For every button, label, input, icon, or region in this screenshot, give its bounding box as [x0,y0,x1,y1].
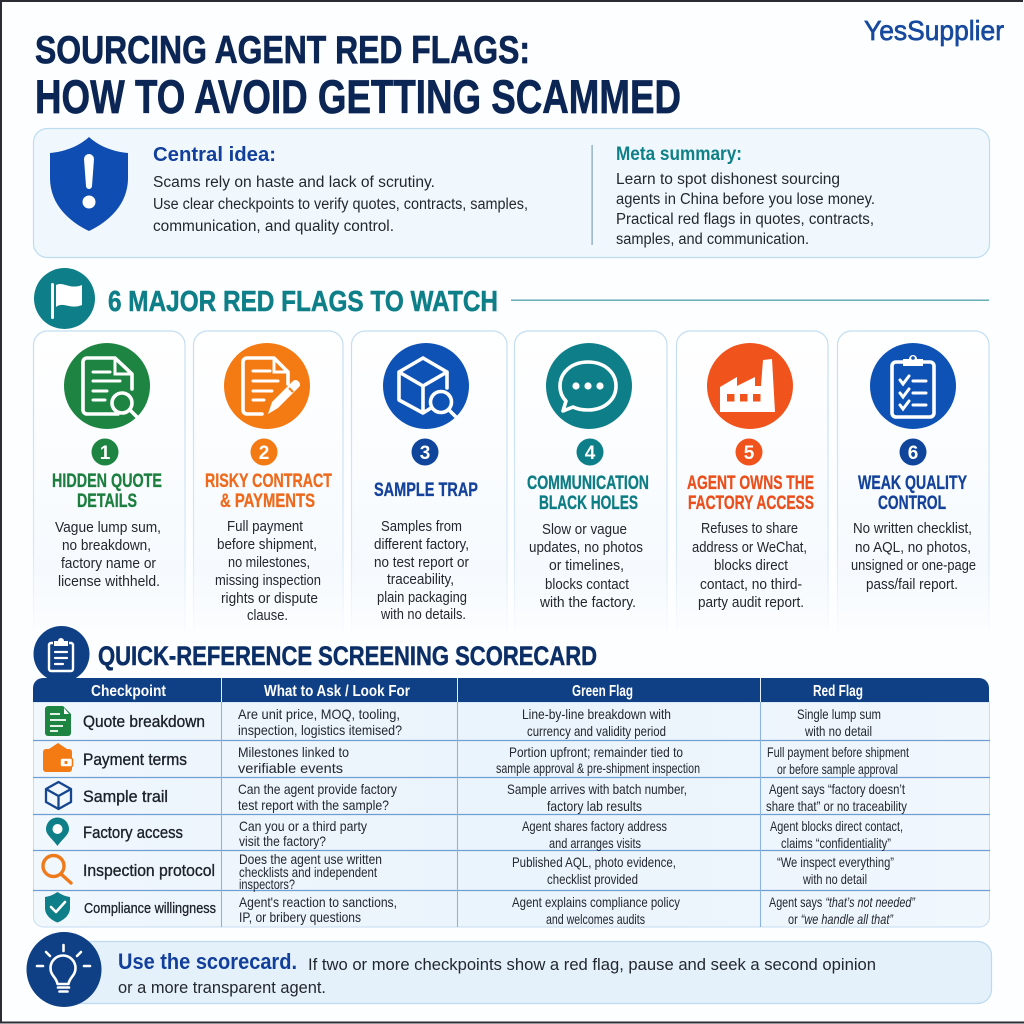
row: compliance willingness: Compliance willingness [84,900,216,917]
row: inspection protocol: with no detail [802,871,867,887]
card description: missing inspection [215,573,321,589]
panel: card 6 weak quality control [838,331,989,630]
title: HOW TO AVOID GETTING SCAMMED [35,71,681,124]
row: quote breakdown: inspection, logistics itemised? [238,722,402,738]
icon: clipboard [34,626,90,682]
icon: warning shield [50,137,128,231]
icon: green document [45,706,71,736]
row: inspection protocol [43,851,894,892]
callout: use the scorecard [26,932,992,1007]
heading: quick-reference screening scorecard [34,626,597,682]
card description: no AQL, no photos, [855,540,971,556]
table header [33,678,989,702]
table header: Green Flag [572,683,633,700]
panel: card 1 hidden quote details [34,331,185,630]
callout text: Use the scorecard. [118,949,297,974]
row: payment terms: sample approval & pre-shipment inspection [496,760,700,776]
icon: teal shield check [45,892,70,922]
row: factory access: Factory access [83,824,183,842]
card description [374,519,469,623]
card description: or timelines, [549,558,624,574]
card description: Full payment [227,519,303,535]
card description: with the factory. [539,595,636,611]
callout panel [60,942,992,1004]
number 2: 2 [259,443,269,464]
number 1 [92,438,118,466]
card description: No written checklist, [853,521,972,537]
table header: Checkpoint [91,683,167,700]
icon: speech bubble [546,343,632,429]
number 4: 4 [585,443,596,464]
panel: card 2 risky contract and payments [194,331,343,630]
panel: card 5 agent owns the factory access [676,331,828,630]
card title: SAMPLE TRAP [374,480,478,501]
scorecard table [33,678,990,927]
central idea text: communication, and quality control. [153,218,394,235]
icon: contract with pen [224,343,310,429]
number 5: 5 [744,443,755,464]
number 6 [900,438,926,466]
card title: WEAK QUALITY [858,473,967,494]
card description: no test report or [374,555,469,571]
meta summary text: Practical red flags in quotes, contracts, [616,211,874,228]
number 5 [736,438,762,466]
card description: with no details. [380,607,466,623]
card description: rights or dispute [221,591,318,607]
icon: teal location pin [46,818,69,846]
row: factory access: Agent shares factory address [522,818,667,834]
row: quote breakdown: Are unit price, MOQ, tooling, [238,706,400,722]
card title [527,473,649,514]
row: inspection protocol: checklists and independent [239,864,377,880]
row: compliance willingness: or “we handle all that” [788,911,894,927]
row: sample trail: Agent says “factory doesn’t [769,781,905,797]
card description: unsigned or one-page [851,558,976,574]
row: payment terms: Full payment before shipment [767,744,909,760]
number 4 [576,438,604,466]
card description: plain packaging [377,590,467,606]
row: sample trail: Sample arrives with batch number, [507,781,687,797]
card description: clause. [247,608,288,624]
row: sample trail: Sample trail [83,788,168,806]
card description: no breakdown, [62,538,151,554]
card description: before shipment, [217,537,317,553]
row: quote breakdown: Quote breakdown [83,713,205,731]
row: quote breakdown: with no detail [804,723,872,739]
central idea text [153,143,528,235]
card description: address or WeChat, [692,540,807,556]
card description: pass/fail report. [866,577,958,593]
card title [687,473,814,514]
central idea text: Central idea: [153,143,276,166]
number 3: 3 [420,443,430,464]
card title: DETAILS [77,491,137,512]
callout text: or a more transparent agent. [118,978,326,997]
card title: HIDDEN QUOTE [52,471,162,492]
card description: updates, no photos [529,540,643,556]
card description: Slow or vague [542,522,627,538]
row: factory access: Can you or a third party [239,818,367,834]
card description: traceability, [387,572,454,588]
card description: different factory, [374,537,469,553]
row: factory access: visit the factory? [239,833,326,849]
card description [529,522,643,611]
number 3 [412,438,438,466]
row: quote breakdown: currency and validity period [527,723,666,739]
icon: clipboard checklist [870,343,956,429]
number 1: 1 [100,443,111,464]
row: sample trail [46,781,907,814]
panel: central idea and meta summary [34,128,990,258]
row: inspection protocol: Inspection protocol [83,862,215,880]
callout text: If two or more checkpoints show a red flag, pause and seek a second opinion [308,955,876,974]
row: factory access: Agent blocks direct contact, [770,818,903,834]
row: quote breakdown: Single lump sum [797,706,881,722]
card description: factory name or [61,556,156,572]
card title: BLACK HOLES [539,493,638,514]
row: payment terms: verifiable events [238,760,343,776]
row: compliance willingness: IP, or bribery questions [239,909,361,925]
row: compliance willingness: Agent's reaction to sanctions, [239,894,397,910]
card description: Vague lump sum, [55,520,161,536]
row: compliance willingness: Agent says “that’s not needed” [769,894,916,910]
row: inspection protocol: Does the agent use written [239,851,382,867]
meta summary text [616,144,875,248]
row: inspection protocol: Published AQL, photo evidence, [512,854,676,870]
icon: light bulb [26,932,102,1007]
row: inspection protocol: checklist provided [547,871,638,887]
card title: & PAYMENTS [220,491,315,512]
card description: blocks direct [714,558,788,574]
title: SOURCING AGENT RED FLAGS: [35,29,530,72]
card description: party audit report. [698,595,804,611]
card description [55,520,161,590]
row: compliance willingness [45,892,916,927]
icon: flag [34,268,95,329]
card title [858,473,967,514]
meta summary text: Learn to spot dishonest sourcing [616,171,840,188]
heading: quick-reference screening scorecard: QUICK-REFERENCE SCREENING SCORECARD [98,641,597,671]
callout text [118,949,876,997]
row: sample trail: share that” or no traceability [766,798,907,814]
card description: contact, no third- [700,577,802,593]
card description: blocks contact [545,577,629,593]
row: quote breakdown: Line-by-line breakdown with [522,706,671,722]
table body [34,702,990,927]
heading: 6 major red flags: 6 MAJOR RED FLAGS TO WATCH [108,286,498,318]
row: payment terms: Portion upfront; remainder tied to [509,744,683,760]
card description [851,521,976,593]
icon: orange magnifier [43,856,71,883]
logo: YesSupplier: YesSupplier [864,15,1004,46]
row: factory access: claims “confidentiality” [781,835,891,851]
row: inspection protocol: inspectors? [239,876,295,892]
card title: RISKY CONTRACT [205,471,332,492]
meta summary text: samples, and communication. [616,231,809,248]
row: compliance willingness: Agent explains compliance policy [512,894,680,910]
icon: orange wallet [43,743,72,772]
panel: card 3 sample trap [352,331,507,630]
card description: no milestones, [228,555,310,571]
row: payment terms: or before sample approval [777,761,898,777]
card title: AGENT OWNS THE [687,473,814,494]
panel: card 4 communication black holes [514,331,667,630]
row: compliance willingness: and welcomes audits [546,911,645,927]
row: sample trail: factory lab results [547,798,642,814]
central idea text: Scams rely on haste and lack of scrutiny. [153,174,435,191]
card title: CONTROL [878,493,946,514]
row: quote breakdown [45,706,881,739]
card description: license withheld. [58,574,160,590]
table header: What to Ask / Look For [264,683,410,700]
table header: Red Flag [813,683,863,700]
row: payment terms [43,743,909,777]
icon: blue cube [46,782,71,809]
card title: COMMUNICATION [527,473,649,494]
card description: Samples from [381,519,462,535]
card description: Refuses to share [701,521,798,537]
central idea text: Use clear checkpoints to verify quotes, contracts, samples, [153,196,528,213]
number 6: 6 [908,443,918,464]
meta summary text: Meta summary: [616,144,742,165]
card title [205,471,332,512]
row: sample trail: test report with the sample? [238,797,389,813]
card title: FACTORY ACCESS [688,493,814,514]
icon: factory [707,343,793,429]
row: factory access [46,818,903,851]
icon: box with magnifier [383,343,469,429]
row: payment terms: Milestones linked to [238,744,349,760]
card title [52,471,162,512]
heading: 6 major red flags [34,268,989,329]
title [35,29,681,124]
row: inspection protocol: “We inspect everything” [777,854,894,870]
row: factory access: and arranges visits [549,835,641,851]
row: payment terms: Payment terms [83,751,187,769]
row: sample trail: Can the agent provide factory [238,781,397,797]
card description [692,521,807,611]
icon: document with magnifier [64,343,150,429]
meta summary text: agents in China before you lose money. [616,191,875,208]
number 2 [250,438,278,466]
card description [215,519,321,624]
